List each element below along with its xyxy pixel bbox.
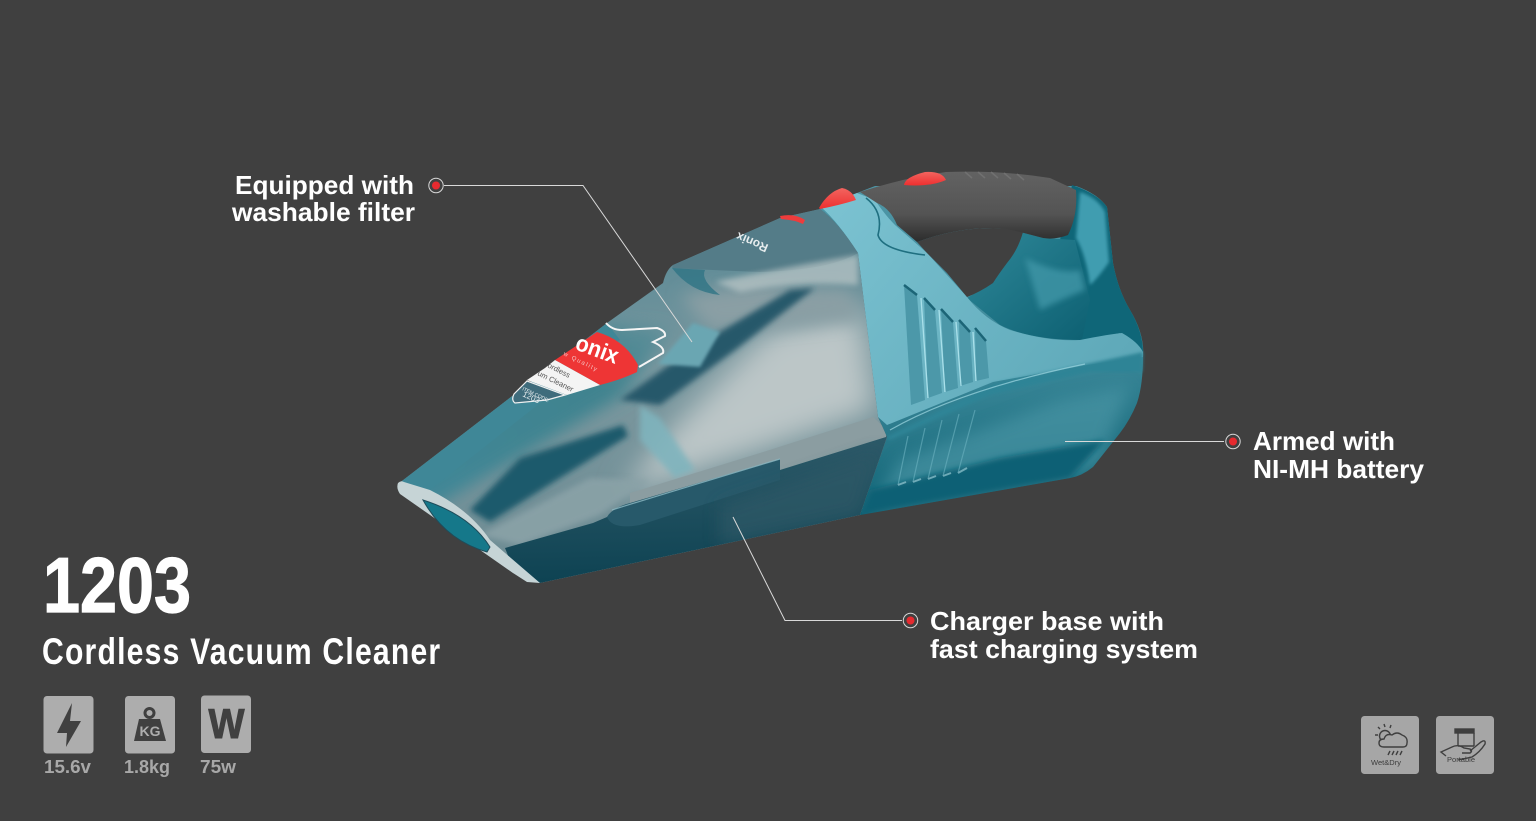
- callout: battery: [1065, 426, 1425, 484]
- groove highlight: [612, 459, 780, 510]
- weight value: 1.8kg: [124, 757, 170, 777]
- lid lower arc: [715, 255, 858, 292]
- washable filter tile: [658, 323, 720, 367]
- lower band highlight: [887, 352, 1143, 440]
- callout text: Equipped with: [235, 170, 414, 200]
- marker dot: [429, 178, 443, 193]
- label brand text: onix: [572, 329, 623, 369]
- lower dark fade: [720, 483, 860, 542]
- leader line: [444, 186, 692, 342]
- voltage value: 15.6v: [44, 757, 91, 777]
- spec: wattage: [200, 696, 251, 777]
- lower grey nose: [485, 478, 628, 544]
- handle well: [967, 232, 1090, 340]
- icon: W: W: [208, 700, 245, 747]
- lower band light line: [890, 364, 1085, 430]
- spec: voltage: [44, 696, 94, 777]
- reflected vents: [898, 410, 975, 485]
- rear body shell: [820, 186, 1143, 515]
- model shield: [513, 381, 565, 403]
- lower shell shading: [882, 390, 1125, 510]
- callout: charger base: [733, 517, 1198, 664]
- rear handle column: [1060, 185, 1143, 353]
- icon: sun and cloud with rain: [1375, 724, 1407, 755]
- leader line: [733, 517, 902, 620]
- label product text: ordless: [546, 361, 572, 380]
- label model number: 1203: [521, 390, 542, 406]
- badge: wet and dry: [1361, 716, 1419, 774]
- ronix label outline: [606, 323, 665, 367]
- marker dot: [1226, 434, 1240, 449]
- label model text: ITEM CODE:: [521, 386, 550, 404]
- upper light shell: [821, 193, 1143, 425]
- white label panel: [527, 360, 600, 395]
- cyan reflection: [640, 405, 695, 478]
- callout text: washable filter: [231, 197, 415, 227]
- callout: washable filter: [231, 170, 692, 342]
- handle column highlight: [1076, 192, 1109, 285]
- red button: middle: [819, 188, 856, 209]
- callout text: fast charging system: [930, 634, 1198, 664]
- badge label: Wet&Dry: [1371, 758, 1401, 767]
- collar crease: [866, 198, 925, 255]
- nose upper edge tint: [398, 323, 620, 490]
- handle opening: [917, 228, 1023, 297]
- nozzle lip: [397, 481, 540, 583]
- upper grey area: [680, 285, 860, 330]
- grip: [860, 172, 1076, 242]
- nose dark streak: [470, 425, 628, 522]
- callout text: Armed with: [1253, 426, 1395, 456]
- title: model number: 1203: [43, 541, 191, 629]
- lower dark panel: [505, 432, 887, 583]
- icon: kg weight: KG: [140, 723, 161, 739]
- lid brand text: Ronix: [734, 229, 770, 255]
- side groove: [607, 459, 780, 526]
- icon: lightning bolt: [44, 696, 94, 754]
- well highlight: [1025, 258, 1085, 310]
- callout text: NI-MH battery: [1253, 454, 1425, 484]
- badge: portable: [1436, 716, 1494, 774]
- red button: handle: [904, 172, 946, 185]
- label tagline: w Quality: [561, 351, 599, 374]
- canister base: [398, 209, 887, 583]
- dark diagonal band: [620, 288, 815, 405]
- teal nose tint: [424, 320, 666, 504]
- product illustration: cordless vacuum cleaner: [397, 172, 1143, 583]
- lid: [672, 209, 858, 272]
- subtitle: product name: Cordless Vacuum Cleaner: [42, 632, 441, 673]
- spec: weight: [124, 696, 175, 777]
- seam strip: [630, 417, 887, 508]
- light centre: [620, 310, 875, 495]
- red button: front: [780, 215, 805, 224]
- leader line: [1065, 440, 1224, 442]
- red label: [555, 332, 638, 385]
- nozzle opening: [423, 500, 490, 552]
- wattage value: 75w: [200, 757, 237, 777]
- badge label: Portable: [1447, 755, 1475, 764]
- icon: hand holding vacuum: [1441, 729, 1485, 760]
- bottom shell dark edge: [860, 440, 1105, 515]
- callout text: Charger base with: [930, 606, 1164, 636]
- grip ridges: [965, 172, 1024, 180]
- label product text line 2: um Cleaner: [536, 369, 575, 394]
- lid shadow: [672, 268, 720, 295]
- canister interior shading: [398, 209, 887, 583]
- air vents: [904, 285, 989, 405]
- marker dot: [903, 613, 918, 628]
